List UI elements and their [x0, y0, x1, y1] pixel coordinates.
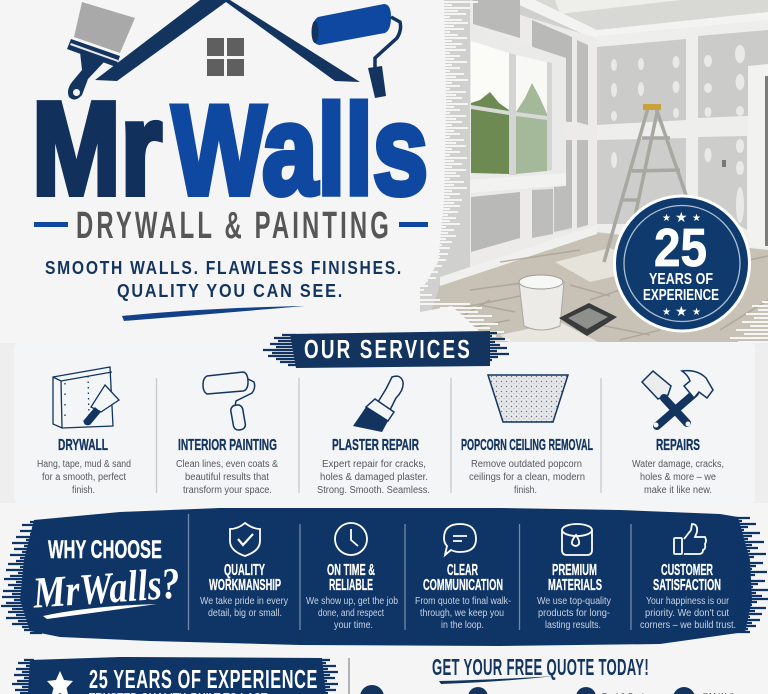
reason: clear communication: COMMUNICATION — [423, 577, 503, 594]
contact row — [360, 685, 738, 694]
icon: brush — [353, 376, 403, 432]
ceiling — [530, 0, 768, 33]
floor — [420, 233, 768, 345]
reason: on time and reliable: ON TIME & — [327, 562, 375, 579]
service: popcorn ceiling removal — [461, 375, 593, 496]
icon: phone — [360, 685, 384, 694]
service: interior painting: transform your space. — [183, 485, 272, 496]
icon: speech bubble — [444, 524, 476, 555]
badge: 25 years of experience: ★ — [692, 307, 701, 318]
icon: paint roller — [312, 4, 401, 98]
heading: our services — [263, 331, 509, 368]
tagline: QUALITY YOU CAN SEE. — [117, 281, 344, 301]
icon: roller — [203, 372, 255, 431]
reason: premium materials: products for long- — [538, 608, 610, 619]
service: interior painting: beautiful results that — [185, 472, 269, 483]
back wall — [597, 20, 768, 250]
heading: why choose: MrWalls? — [31, 558, 181, 618]
reason: quality workmanship: We take pride in every — [200, 596, 288, 607]
reason: quality workmanship: detail, big or small. — [208, 608, 282, 619]
service: popcorn ceiling removal: POPCORN CEILING REMOVAL — [461, 437, 593, 454]
brushed white edge — [420, 0, 446, 286]
reason: clear communication: through, we keep you — [420, 608, 504, 619]
reason: customer satisfaction — [640, 524, 736, 631]
badge: 25 years of experience: ★ — [662, 213, 671, 224]
service: interior painting — [176, 372, 278, 496]
heading: why choose — [31, 536, 181, 619]
icon: email — [468, 687, 488, 694]
icon: location — [576, 687, 596, 694]
service: repairs: holes & more – we — [640, 472, 716, 483]
service: drywall: Hang, tape, mud & sand — [37, 459, 131, 470]
call to action heading — [432, 654, 649, 684]
reason: customer satisfaction: priority. We don't cut — [645, 608, 729, 619]
service: drywall: finish. — [72, 485, 95, 496]
reason: customer satisfaction: CUSTOMER — [661, 562, 713, 579]
reason: premium materials: MATERIALS — [548, 577, 602, 594]
reason: on time and reliable — [306, 523, 398, 631]
panel: experience banner: 25 YEARS OF EXPERIENCE — [89, 664, 318, 694]
reason: on time and reliable: done, and respect — [318, 608, 384, 619]
service: interior painting: Clean lines, even coats & — [176, 459, 278, 470]
service: plaster repair: Strong. Smooth. Seamless. — [317, 485, 430, 496]
service: popcorn ceiling removal: finish. — [514, 485, 537, 496]
reason: clear communication: in the loop. — [441, 620, 484, 631]
icon: clock — [335, 523, 367, 555]
badge: 25 years of experience: EXPERIENCE — [643, 287, 719, 304]
paint tray — [559, 303, 617, 336]
tagline — [45, 258, 403, 321]
logo — [32, 0, 428, 247]
panel: hero photo of drywall room — [420, 0, 768, 345]
reason: clear communication: From quote to final walk- — [415, 596, 511, 607]
badge: 25 years of experience: ★ — [675, 209, 688, 225]
service: plaster repair: PLASTER REPAIR — [332, 437, 419, 454]
reason: customer satisfaction: SATISFACTION — [653, 577, 721, 594]
reason: quality workmanship — [200, 523, 288, 619]
badge: 25 years of experience — [613, 194, 751, 332]
bucket — [519, 276, 564, 330]
panel: experience banner — [12, 657, 338, 694]
icon: shield — [230, 523, 260, 556]
service: popcorn ceiling removal: ceilings for a clean, modern — [469, 472, 585, 483]
icon: paint brush — [67, 2, 135, 100]
service: drywall: DRYWALL — [58, 437, 108, 454]
reason: clear communication: CLEAR — [447, 562, 478, 579]
reason: premium materials — [537, 524, 611, 631]
service: drywall — [37, 367, 131, 496]
heading: why choose: WHY CHOOSE — [48, 536, 162, 564]
subtitle: DRYWALL & PAINTING — [76, 205, 392, 247]
joint compound spots — [611, 45, 745, 223]
logo wordmark: Walls: Walls — [172, 79, 428, 221]
service: repairs: Water damage, cracks, — [632, 459, 724, 470]
reason: premium materials: lasting results. — [545, 620, 601, 631]
window — [470, 26, 566, 194]
icon: house roof — [95, 0, 360, 82]
service: repairs: REPAIRS — [656, 437, 700, 454]
reason: clear communication — [415, 524, 511, 631]
badge: 25 years of experience: ★ — [675, 303, 688, 319]
icon: drywall sheet and knife — [53, 367, 119, 428]
ladder — [604, 108, 686, 262]
service: popcorn ceiling removal: Remove outdated popcorn — [471, 459, 582, 470]
badge: 25 years of experience: YEARS OF — [649, 271, 713, 288]
reason: customer satisfaction: corners – we build trust. — [640, 620, 736, 631]
panel: services — [0, 331, 768, 504]
tagline: SMOOTH WALLS. FLAWLESS FINISHES. — [45, 258, 403, 278]
doorway — [748, 64, 768, 247]
service: drywall: for a smooth, perfect — [42, 472, 126, 483]
service: repairs — [632, 371, 724, 496]
service: plaster repair: holes & damaged plaster. — [320, 472, 428, 483]
icon: paint can — [562, 524, 592, 555]
subtitle — [34, 205, 428, 247]
icon: crossed knife and hammer — [642, 371, 713, 428]
service: plaster repair: Expert repair for cracks, — [322, 459, 426, 470]
reason: premium materials: PREMIUM — [552, 562, 597, 579]
reason: on time and reliable: We show up, get the job — [306, 596, 398, 607]
service: interior painting: INTERIOR PAINTING — [178, 437, 277, 454]
panel: why choose — [1, 508, 768, 646]
badge: 25 years of experience: ★ — [692, 213, 701, 224]
left wall — [470, 0, 597, 272]
brushed floor corner — [420, 306, 492, 343]
reason: customer satisfaction: Your happiness is our — [646, 596, 730, 607]
icon: thumbs up — [674, 524, 706, 554]
reason: on time and reliable: your time. — [334, 620, 373, 631]
badge: 25 years of experience: ★ — [662, 307, 671, 318]
badge: 25 years of experience: 25 — [654, 218, 707, 278]
icon: star — [47, 671, 73, 694]
icon: social — [673, 687, 695, 694]
service: repairs: make it like new. — [644, 485, 712, 496]
reason: premium materials: We use top-quality — [537, 596, 611, 607]
service: plaster repair — [317, 376, 430, 496]
reason: quality workmanship: WORKMANSHIP — [209, 577, 281, 594]
heading: our services: OUR SERVICES — [304, 334, 472, 364]
icon: house window — [207, 38, 244, 76]
logo wordmark: Mr: Mr — [32, 75, 162, 222]
reason: quality workmanship: QUALITY — [224, 562, 265, 579]
reason: on time and reliable: RELIABLE — [329, 577, 373, 594]
